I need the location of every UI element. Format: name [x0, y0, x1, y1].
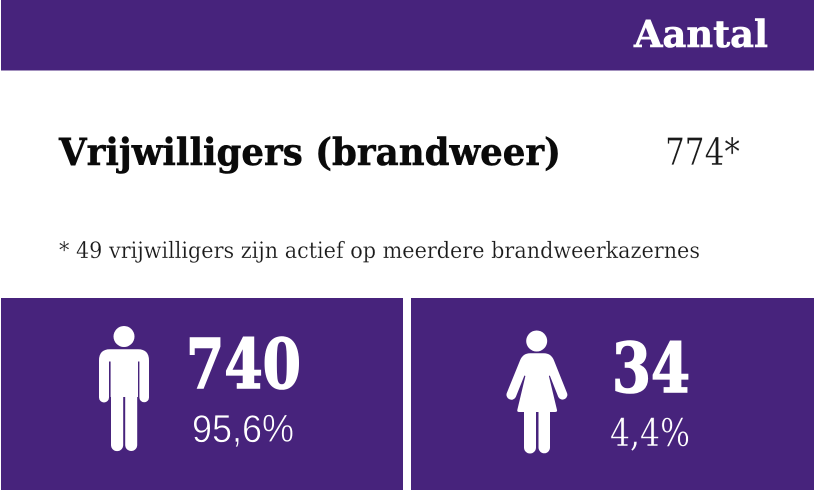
- icon: woman: [506, 330, 567, 454]
- percentage: 4,4%: 4,4%: [610, 411, 690, 455]
- footnote: * 49 vrijwilligers zijn actief op meerdere brandweerkazernes: [59, 239, 700, 264]
- stat: 740: 740: [186, 325, 301, 405]
- header band: [1, 0, 814, 70]
- stat: 34: 34: [612, 329, 690, 409]
- panel: men: [1, 298, 403, 490]
- panel: women: [411, 298, 814, 490]
- icon: man: [99, 326, 149, 451]
- row value: 774*: 774*: [665, 131, 740, 174]
- heading: Aantal: Aantal: [633, 12, 768, 56]
- row label: Vrijwilligers (brandweer): Vrijwilligers (brandweer): [58, 130, 561, 174]
- percentage: 95,6%: 95,6%: [192, 408, 294, 451]
